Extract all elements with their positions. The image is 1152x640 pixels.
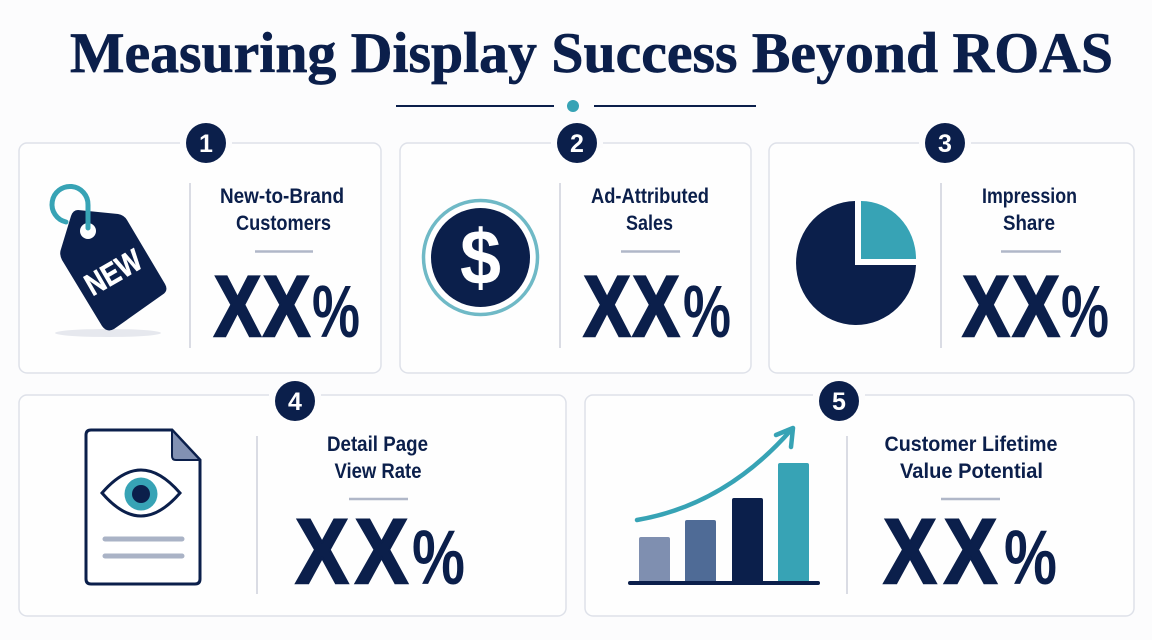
metric: X bbox=[296, 501, 348, 603]
metric bbox=[584, 259, 731, 355]
metric: % bbox=[1004, 515, 1057, 601]
label line 2: Sales bbox=[626, 211, 673, 235]
metric: X bbox=[214, 259, 261, 355]
badge 3 bbox=[925, 123, 965, 163]
badge 5 bbox=[819, 381, 859, 421]
badge 2: 2 bbox=[570, 130, 584, 158]
icon: document with eye bbox=[86, 430, 200, 584]
badge 3: 3 bbox=[938, 130, 952, 158]
icon: new tag: NEW bbox=[79, 242, 149, 303]
label: Impression bbox=[982, 184, 1077, 208]
label: New-to-Brand bbox=[220, 184, 344, 208]
panel: Ad-Attributed Sales bbox=[400, 123, 751, 373]
label: Detail Page bbox=[327, 432, 428, 456]
metric bbox=[884, 501, 1057, 603]
title: Measuring Display Success Beyond ROAS bbox=[70, 22, 1113, 85]
panel: Impression Share bbox=[769, 123, 1134, 373]
metric: % bbox=[412, 515, 465, 601]
metric: X bbox=[584, 259, 630, 355]
icon: growth chart bbox=[630, 428, 818, 583]
metric: X bbox=[263, 259, 310, 355]
metric bbox=[962, 259, 1109, 355]
label line 2: View Rate bbox=[334, 459, 422, 483]
label line 2: Share bbox=[1003, 211, 1055, 235]
panel: Customer Lifetime Value Potential bbox=[585, 381, 1134, 616]
label line 2: Customers bbox=[236, 211, 331, 235]
badge 4: 4 bbox=[288, 388, 302, 416]
icon: dollar coin: $ bbox=[460, 213, 501, 301]
title divider bbox=[396, 100, 756, 112]
badge 4 bbox=[275, 381, 315, 421]
metric: % bbox=[683, 270, 731, 353]
metric: X bbox=[1012, 259, 1060, 355]
metric bbox=[214, 259, 360, 355]
metric: X bbox=[632, 259, 680, 355]
badge 2 bbox=[557, 123, 597, 163]
panel: Detail Page View Rate bbox=[19, 381, 566, 616]
label line 2: Value Potential bbox=[900, 459, 1043, 483]
metric: % bbox=[312, 270, 360, 353]
label: Customer Lifetime bbox=[884, 432, 1058, 456]
icon: new tag bbox=[52, 186, 166, 337]
metric: X bbox=[962, 259, 1010, 355]
icon: dollar coin bbox=[424, 200, 538, 314]
metric: X bbox=[884, 501, 936, 603]
badge 5: 5 bbox=[832, 388, 846, 416]
badge 1: 1 bbox=[199, 130, 213, 158]
icon: pie chart bbox=[796, 201, 916, 325]
label: Ad-Attributed bbox=[591, 184, 709, 208]
metric bbox=[296, 501, 465, 603]
panel: New-to-Brand Customers bbox=[19, 123, 381, 373]
metric: X bbox=[944, 501, 997, 603]
metric: X bbox=[355, 501, 408, 603]
badge 1 bbox=[186, 123, 226, 163]
metric: % bbox=[1061, 270, 1109, 353]
